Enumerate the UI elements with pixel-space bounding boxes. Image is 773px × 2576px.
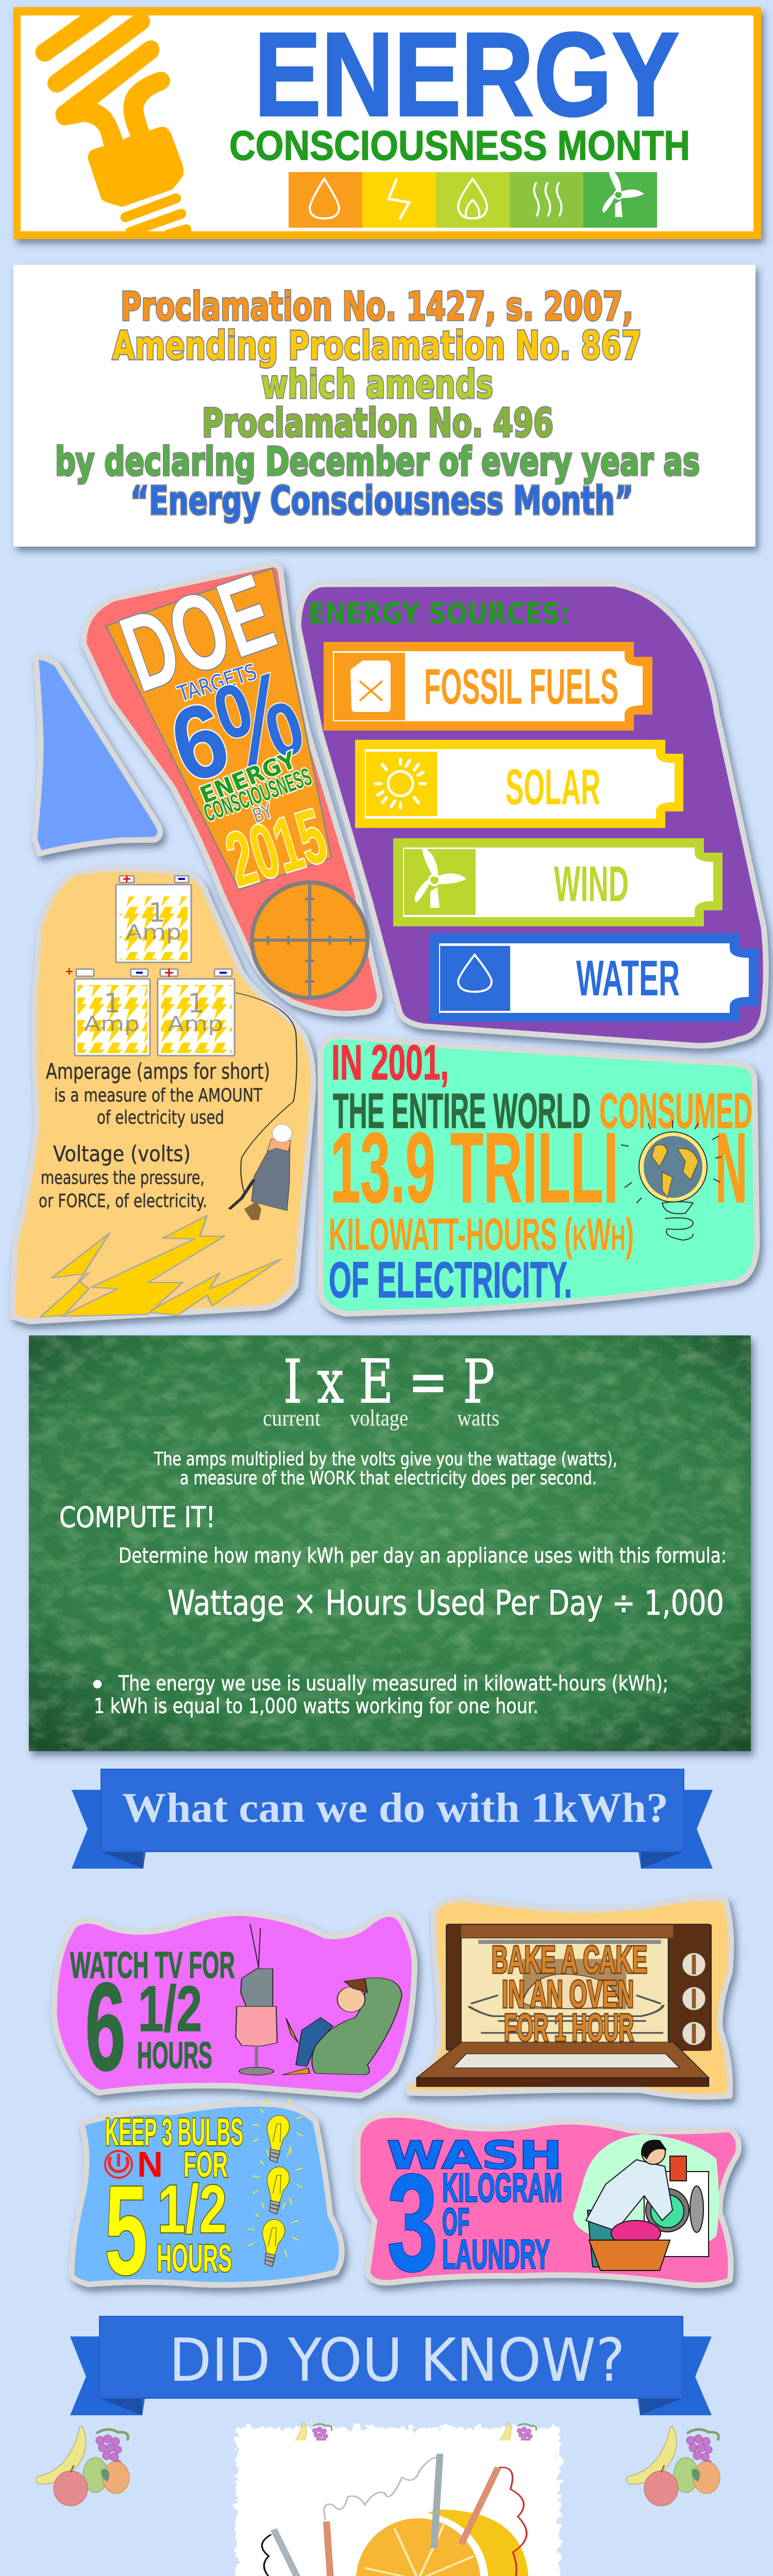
- icon: bulbs: [248, 2098, 303, 2267]
- text: bake a cake: FOR 1 HOUR: [504, 2006, 634, 2049]
- text: 6%: [158, 643, 316, 805]
- panel: chalkboard: [29, 1335, 751, 1751]
- row: water: [429, 934, 759, 1022]
- text: of electricity: OF ELECTRICITY.: [329, 1251, 572, 1308]
- text: energy consciousness: [196, 746, 315, 827]
- text: voltage: measures the pressure,: [41, 1167, 205, 1189]
- panel: wash laundry: [358, 2115, 738, 2300]
- text: keep 3 bulbs: HOURS: [157, 2236, 232, 2280]
- icon: battery 1: 1: [148, 897, 165, 928]
- icon: battery 2: [75, 969, 150, 1056]
- icon: globe light bulb: [621, 1121, 721, 1240]
- icon: battery 3: [158, 969, 234, 1056]
- text: keep 3 bulbs: [105, 2110, 243, 2301]
- formula labels: voltage: [350, 1405, 408, 1431]
- banner: title: [13, 7, 761, 239]
- image: fruit battery clock: [236, 2422, 575, 2576]
- heading: compute it: COMPUTE IT!: [59, 1501, 215, 1534]
- ribbon: did you know: DID YOU KNOW?: [169, 2326, 625, 2395]
- text: keep 3 bulbs: 5: [105, 2159, 148, 2301]
- icon: oven: [417, 1924, 711, 2087]
- icon: battery 3: Amp: [167, 1012, 223, 1036]
- panel: proclamation: Proclamation No. 496: [202, 400, 553, 446]
- panel: keep 3 bulbs on: KEEP 3 BULBS: [105, 2110, 243, 2154]
- text: amperage: of electricity used: [97, 1107, 224, 1128]
- text: plus sign: +: [65, 965, 74, 977]
- ribbon: what can we do: What can we do with 1kWh?: [122, 1784, 668, 1831]
- icon: battery 3: 1: [188, 988, 205, 1019]
- text: voltage: [39, 1141, 207, 1212]
- row: fossil fuels: FOSSIL FUELS: [424, 658, 618, 715]
- panel: bake a cake: [407, 1899, 731, 2097]
- icon: worker with hose: [229, 993, 297, 1220]
- text: 6%: %: [201, 643, 316, 797]
- text: kilowatt-hours: KILOWATT-HOURS (KWH): [329, 1209, 634, 1260]
- text: amperage: [46, 1059, 270, 1128]
- text: wash 3 kilogram of laundry: KILOGRAM: [442, 2165, 562, 2210]
- decorative blue triangle shape: [35, 657, 160, 854]
- text: wash 3 kilogram of laundry: LAUNDRY: [442, 2231, 550, 2277]
- text: watch tv: 6: [85, 1956, 126, 2097]
- text: by: BY: [249, 800, 276, 827]
- icon: battery 1: [116, 876, 191, 962]
- text: voltage: or FORCE, of electricity.: [39, 1191, 207, 1212]
- text: DOE: DOE: [107, 551, 288, 715]
- text: bake a cake: [492, 1938, 647, 2049]
- formula labels: watts: [457, 1405, 499, 1431]
- text: energy consciousness: ENERGY: [196, 746, 300, 809]
- text: explanation: [154, 1449, 617, 1489]
- text: voltage: Voltage (volts): [53, 1141, 191, 1166]
- icon: power symbol: [105, 2151, 132, 2178]
- text: kWh note: [93, 1672, 668, 1718]
- text: wash 3 kilogram of laundry: [387, 2133, 562, 2300]
- panel: proclamation: [13, 265, 755, 547]
- panel: amperage and voltage: [12, 869, 313, 1321]
- text: energy consciousness: CONSCIOUSNESS: [200, 763, 315, 827]
- text: kWh note: 1 kWh is equal to 1,000 watts working for one hour.: [94, 1694, 539, 1718]
- heading: consciousness month: CONSCIOUSNESS MONTH: [229, 123, 690, 169]
- panel: keep 3 bulbs on: [72, 2098, 342, 2301]
- panel: world consumption: [321, 1035, 757, 1314]
- icon: man watching tv: [236, 1924, 402, 2075]
- icon: battery 2: 1: [104, 988, 121, 1019]
- icon strip: [289, 169, 657, 228]
- row: wind: [393, 838, 722, 926]
- heading: ENERGY: ENERGY: [254, 8, 679, 141]
- text: explanation: a measure of the WORK that electricity does per second.: [180, 1468, 597, 1489]
- text: bake a cake: IN AN OVEN: [502, 1973, 634, 2015]
- text: explanation: The amps multiplied by the volts give you the wattage (watts),: [154, 1449, 617, 1470]
- formula labels: current: [263, 1405, 321, 1431]
- panel: DOE target pennant: [84, 551, 380, 1013]
- text: 6%: 6: [158, 679, 241, 805]
- ribbon: did you know: [70, 2316, 712, 2415]
- text: targets: TARGETS: [175, 659, 260, 707]
- text: wash 3 kilogram of laundry: 3: [387, 2145, 438, 2300]
- row: water: WATER: [576, 950, 680, 1006]
- text: N: N: [137, 2144, 163, 2184]
- text: watch tv: [70, 1945, 235, 2097]
- panel: energy sources: [298, 584, 766, 1046]
- icon: man doing laundry: [573, 2134, 719, 2270]
- text: wash 3 kilogram of laundry: OF: [442, 2200, 469, 2243]
- heading: energy sources: ENERGY SOURCES:: [308, 597, 570, 631]
- text: 2015: 2015: [217, 792, 335, 903]
- text: watch tv: HOURS: [137, 2035, 212, 2076]
- icon: light bulb: [45, 11, 187, 234]
- row: solar: SOLAR: [506, 759, 600, 815]
- text: keep 3 bulbs: FOR: [183, 2144, 228, 2184]
- ribbon: what can we do: [72, 1769, 713, 1869]
- row: solar: [355, 740, 683, 828]
- row: fossil fuels: [324, 642, 652, 731]
- icon: battery 2: Amp: [84, 1012, 140, 1036]
- panel: proclamation: which amends: [261, 361, 493, 407]
- text: amperage: Amperage (amps for short): [46, 1059, 270, 1084]
- text: in 2001: IN 2001,: [331, 1035, 449, 1090]
- text: watch tv: WATCH TV FOR: [70, 1945, 235, 1986]
- icons: fruit clusters: [36, 2426, 726, 2576]
- formula: I x E = P: I x E = P: [283, 1347, 495, 1417]
- icon: lightning bolts: [40, 1215, 281, 1317]
- text: wash 3 kilogram of laundry: WASH: [387, 2133, 562, 2178]
- text: kWh note: The energy we use is usually measured in kilowatt-hours (kWh);: [118, 1672, 668, 1696]
- text: bake a cake: BAKE A CAKE: [492, 1938, 647, 1981]
- panel: watch TV: [54, 1913, 414, 2097]
- text: amperage: is a measure of the AMOUNT: [54, 1085, 263, 1106]
- icon: battery 1: Amp: [126, 921, 181, 944]
- row: wind: WIND: [554, 856, 629, 912]
- text: watch tv: 1/2: [138, 1973, 202, 2045]
- icon: crosshair target: [252, 883, 367, 998]
- formula labels: [263, 1405, 499, 1431]
- text: keep 3 bulbs: 1/2: [158, 2171, 227, 2247]
